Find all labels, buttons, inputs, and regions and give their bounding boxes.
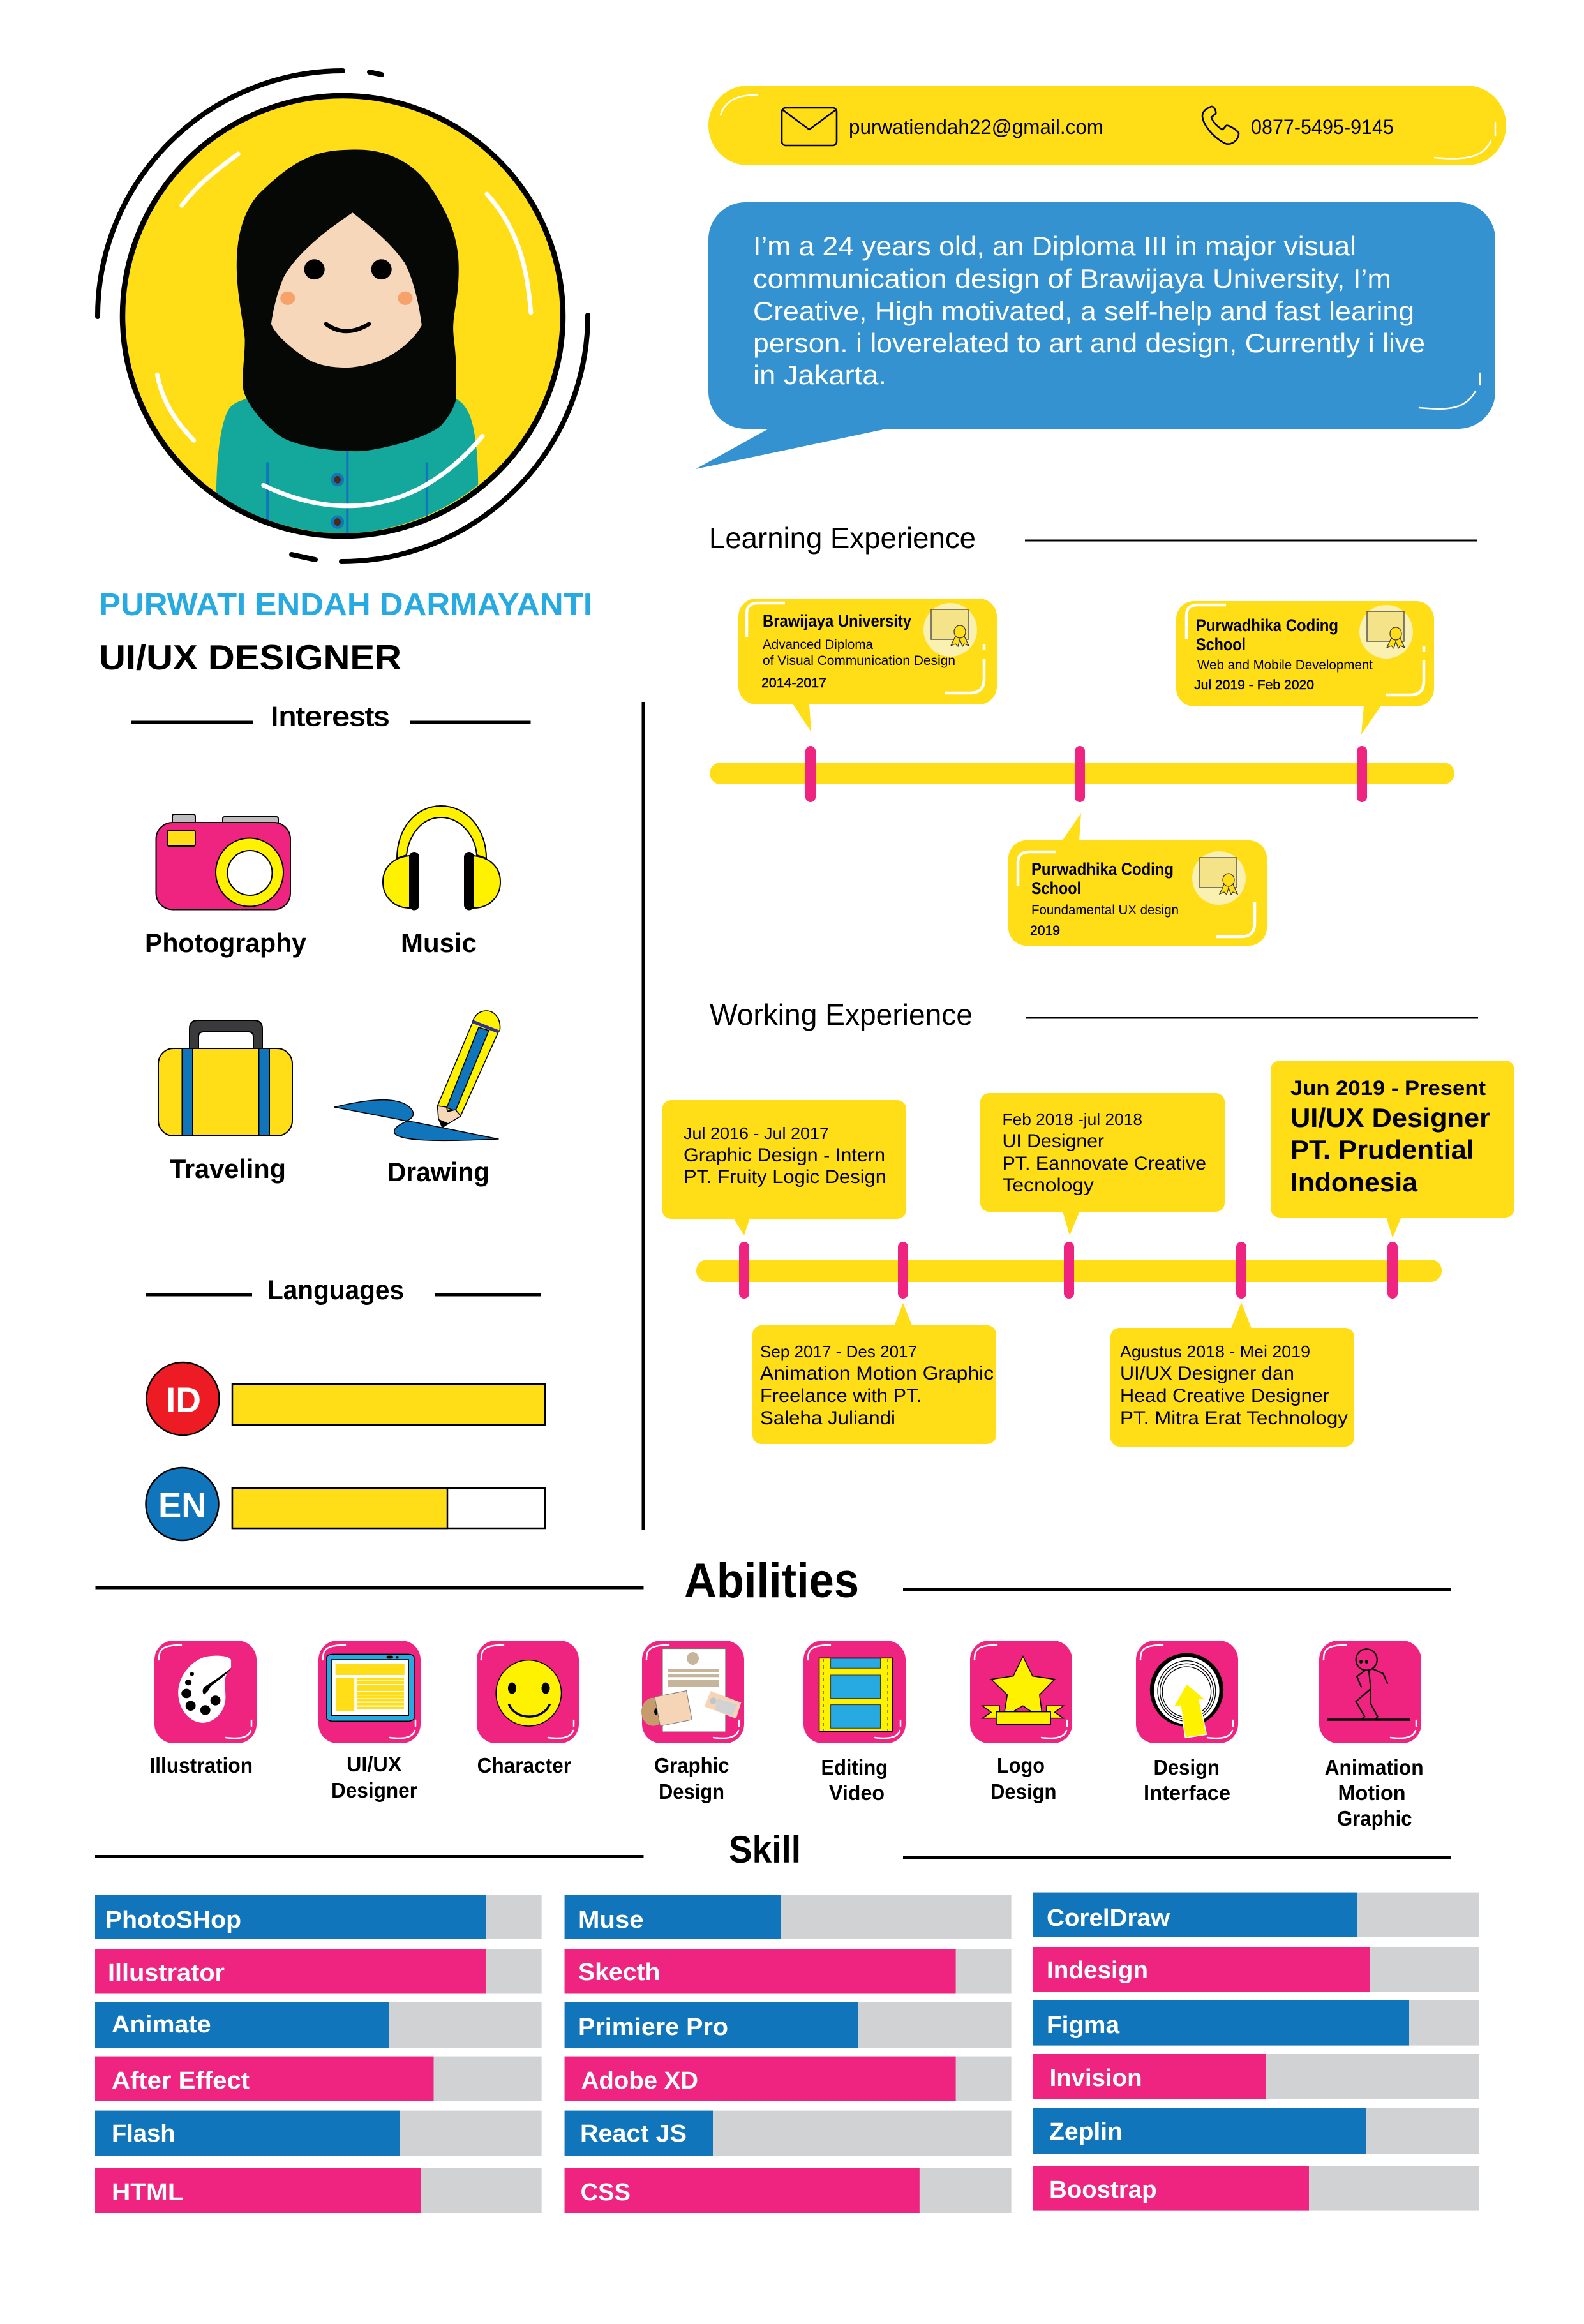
callout: Purwadhika Web and Mobile [1176, 601, 1434, 734]
heading: learning experience [709, 521, 1477, 555]
callout: Purwadhika Web and Mobile: School [1196, 635, 1246, 654]
skill bars column 1 [95, 1895, 542, 2213]
tile: Logo Design [970, 1641, 1072, 1803]
tile: Animation Motion Graphic [1319, 1641, 1424, 1830]
tile: Editing Video [803, 1641, 906, 1805]
profile speech bubble [696, 202, 1495, 469]
callout: Prudential: Indonesia [1290, 1167, 1418, 1197]
timeline bar [696, 1260, 1442, 1282]
profile text: communication design of Brawijaya University, I’m [753, 264, 1391, 294]
job title: UI/UX DESIGNER [99, 637, 401, 677]
icon: suitcase [158, 1020, 292, 1136]
tile: UI/UX Designer [318, 1641, 421, 1802]
callout: Brawijaya University: of Visual Communication Design [763, 653, 955, 668]
icon: smiley [496, 1660, 562, 1726]
interest: drawing: Drawing [387, 1157, 489, 1187]
timeline bar [710, 763, 1454, 784]
bar: Illustrator [95, 1949, 542, 1993]
callout: Fruity Logic: PT. Fruity Logic Design [684, 1166, 886, 1188]
heading: languages: Languages [267, 1275, 404, 1306]
character illustration [157, 149, 531, 533]
bar: Boostrap [1033, 2166, 1479, 2211]
callout: Saleha Juliandi: Saleha Juliandi [760, 1408, 895, 1429]
level bar [232, 1488, 545, 1528]
heading: skill [95, 1828, 1451, 1871]
email text: purwatiendah22@gmail.com [849, 115, 1103, 138]
bar: Figma: Figma [1047, 2012, 1120, 2039]
tile: Editing Video: Editing [821, 1755, 888, 1779]
bar: Primiere Pro [565, 2002, 1012, 2048]
icon: film strip [819, 1658, 892, 1731]
profile text: in Jakarta. [753, 360, 886, 390]
tile: UI/UX Designer: Designer [331, 1778, 417, 1802]
badge: EN [146, 1468, 218, 1540]
callout: Eannovate: Tecnology [1002, 1175, 1094, 1196]
bar: CorelDraw [1033, 1893, 1479, 1937]
orbit arcs [98, 71, 588, 562]
tile: Character [477, 1641, 579, 1777]
tile: Animation Motion Graphic: Motion [1338, 1781, 1405, 1805]
tile: Design Interface: Interface [1144, 1781, 1230, 1805]
bar: Figma [1033, 2000, 1479, 2046]
interest: traveling: Traveling [170, 1154, 286, 1184]
callout: Eannovate: Feb 2018 -jul 2018 [1002, 1110, 1142, 1129]
callout: Prudential: UI/UX Designer [1290, 1103, 1490, 1133]
heading: abilities: Abilities [684, 1554, 859, 1608]
icon: palette [178, 1656, 232, 1723]
icon: stick figure [1327, 1649, 1410, 1720]
tile: Logo Design: Design [990, 1780, 1057, 1803]
bar: HTML [95, 2168, 542, 2213]
icon: pointer on button [1150, 1653, 1223, 1738]
bar: After Effect [95, 2057, 542, 2101]
callout: Purwadhika Web and Mobile: Web and Mobile Development [1197, 658, 1373, 673]
bar: Muse: Muse [578, 1907, 643, 1933]
callout: Prudential [1271, 1061, 1514, 1238]
callout: Eannovate: PT. Eannovate Creative [1002, 1153, 1206, 1174]
bar: Zeplin: Zeplin [1049, 2119, 1123, 2145]
bar: Zeplin [1033, 2108, 1479, 2154]
callout: Purwadhika Web and Mobile: Purwadhika Coding [1196, 616, 1338, 635]
tile: Character: Character [477, 1754, 571, 1777]
heading: working experience [710, 998, 1478, 1031]
callout: Prudential: Jun 2019 - Present [1290, 1076, 1486, 1099]
callout: Mitra Erat: Head Creative Designer [1120, 1385, 1329, 1406]
bar: PhotoSHop: PhotoSHop [105, 1907, 241, 1933]
icon: headphones [383, 806, 500, 910]
bar: HTML: HTML [112, 2179, 184, 2206]
language: Indonesian [147, 1362, 545, 1435]
bar: CSS: CSS [581, 2179, 631, 2206]
bar: Skecth: Skecth [578, 1959, 660, 1986]
callout: Purwadhika Foundamental UX: School [1031, 879, 1081, 898]
icon: certificate [1359, 605, 1413, 659]
heading: interests: Interests [271, 701, 389, 731]
bar: React JS [565, 2111, 1012, 2156]
callout: Fruity Logic: Jul 2016 - Jul 2017 [684, 1124, 829, 1143]
interest: drawing [334, 1011, 500, 1187]
interest: music [383, 806, 500, 958]
interest: traveling [158, 1020, 292, 1184]
callout: Purwadhika Web and Mobile: Jul 2019 - Feb 2020 [1194, 678, 1314, 692]
icon: certificate [1192, 851, 1246, 905]
callout: Mitra Erat: Agustus 2018 - Mei 2019 [1120, 1342, 1310, 1361]
heading: working experience: Working Experience [710, 998, 973, 1031]
tile: Illustration: Illustration [149, 1754, 253, 1777]
callout: Purwadhika Foundamental UX: Foundamental UX design [1031, 903, 1179, 918]
bar: React JS: React JS [580, 2120, 687, 2147]
tile: Graphic Design [641, 1641, 744, 1803]
callout: Mitra Erat: UI/UX Designer dan [1120, 1363, 1294, 1384]
timeline ticks [739, 1242, 1398, 1299]
icon: pencil and stroke [334, 1011, 500, 1140]
yellow portrait circle [123, 96, 563, 536]
callout: Brawijaya University: Brawijaya University [763, 611, 911, 630]
icon: phone [1202, 107, 1239, 144]
bar: Adobe XD [565, 2057, 1012, 2101]
heading: interests [131, 701, 531, 731]
tile: Design Interface: Design [1154, 1755, 1220, 1779]
name heading: PURWATI ENDAH DARMAYANTI [99, 588, 592, 622]
language: English: EN [158, 1485, 207, 1525]
tile: Graphic Design: Design [659, 1780, 724, 1803]
callout: Prudential: PT. Prudential [1290, 1135, 1474, 1165]
callout: Saleha Juliandi: Freelance with PT. [760, 1385, 922, 1406]
bar: PhotoSHop [95, 1895, 542, 1939]
tile: Animation Motion Graphic: Graphic [1337, 1806, 1412, 1830]
bar: Invision [1033, 2054, 1479, 2099]
bar: Invision: Invision [1050, 2065, 1142, 2092]
badge: ID [147, 1362, 220, 1435]
callout: Purwadhika Foundamental UX: 2019 [1030, 923, 1060, 938]
tile: UI/UX Designer: UI/UX [347, 1752, 401, 1776]
profile text [753, 231, 1425, 390]
bar: After Effect: After Effect [112, 2067, 250, 2094]
level bar [232, 1384, 545, 1425]
icon: camera [156, 814, 290, 910]
callout: Fruity Logic [662, 1100, 906, 1235]
callout: Mitra Erat [1110, 1302, 1354, 1447]
interest: photography: Photography [145, 928, 307, 958]
learning timeline [710, 599, 1454, 946]
callout: Eannovate [980, 1093, 1225, 1235]
callout: Saleha Juliandi: Animation Motion Graphic [760, 1363, 994, 1384]
profile text: Creative, High motivated, a self-help and fast learing [753, 296, 1414, 326]
tile: Illustration [149, 1641, 257, 1777]
tile: Graphic Design: Graphic [654, 1754, 729, 1777]
heading: languages [146, 1275, 541, 1306]
interest: photography [145, 814, 307, 958]
tile: Editing Video: Video [829, 1781, 885, 1805]
skill bars column 2 [565, 1895, 1012, 2213]
callout: Brawijaya University: 2014-2017 [761, 676, 826, 690]
interest: music: Music [401, 928, 477, 958]
bar: Animate [95, 2002, 542, 2048]
icon: star with ribbon [982, 1657, 1063, 1724]
callout: Brawijaya University [738, 599, 997, 732]
icon: envelope [782, 108, 837, 145]
bar: Boostrap: Boostrap [1049, 2177, 1157, 2203]
circle outline [123, 96, 563, 536]
tile: Design Interface [1136, 1641, 1238, 1805]
profile text: person. i loverelated to art and design, Currently i live [753, 328, 1425, 358]
language: English [146, 1468, 545, 1540]
heading: abilities [96, 1554, 1451, 1608]
icon: print materials [641, 1649, 741, 1732]
heading: skill: Skill [729, 1828, 801, 1871]
ability tiles [149, 1641, 1424, 1830]
bar: Primiere Pro: Primiere Pro [578, 2014, 728, 2041]
working timeline [662, 1061, 1514, 1447]
phone number: 0877-5495-9145 [1251, 115, 1394, 138]
bar: Indesign [1033, 1947, 1479, 1992]
bar: Flash [95, 2111, 542, 2156]
bar: Indesign: Indesign [1047, 1957, 1148, 1984]
contact pill [708, 86, 1506, 165]
bar: Skecth [565, 1949, 1012, 1993]
bar: CSS [565, 2168, 1012, 2213]
bar: Flash: Flash [112, 2120, 176, 2147]
icon: screen layout [327, 1654, 414, 1721]
callout: Saleha Juliandi [752, 1303, 996, 1444]
callout: Eannovate: UI Designer [1002, 1131, 1104, 1152]
callout: Purwadhika Foundamental UX [1008, 813, 1267, 946]
callout: Mitra Erat: PT. Mitra Erat Technology [1120, 1408, 1348, 1429]
bar: Illustrator: Illustrator [108, 1960, 225, 1986]
avatar portrait [98, 71, 588, 562]
bar: Adobe XD: Adobe XD [581, 2067, 698, 2094]
callout: Brawijaya University: Advanced Diploma [763, 637, 873, 652]
profile text: I’m a 24 years old, an Diploma III in major visual [753, 231, 1356, 261]
callout: Fruity Logic: Graphic Design - Intern [684, 1145, 885, 1166]
timeline ticks [805, 746, 1367, 802]
bar: Muse [565, 1895, 1012, 1939]
tile: Animation Motion Graphic: Animation [1325, 1755, 1424, 1779]
language: Indonesian: ID [166, 1380, 201, 1420]
bar: CorelDraw: CorelDraw [1047, 1905, 1170, 1932]
column divider [642, 702, 645, 1530]
callout: Saleha Juliandi: Sep 2017 - Des 2017 [760, 1342, 917, 1361]
bar: Animate: Animate [112, 2011, 211, 2038]
icon: certificate [923, 603, 977, 657]
heading: learning experience: Learning Experience [709, 521, 976, 555]
callout: Purwadhika Foundamental UX: Purwadhika Coding [1031, 860, 1174, 879]
skill bars column 3 [1033, 1893, 1479, 2211]
tile: Logo Design: Logo [997, 1754, 1045, 1777]
